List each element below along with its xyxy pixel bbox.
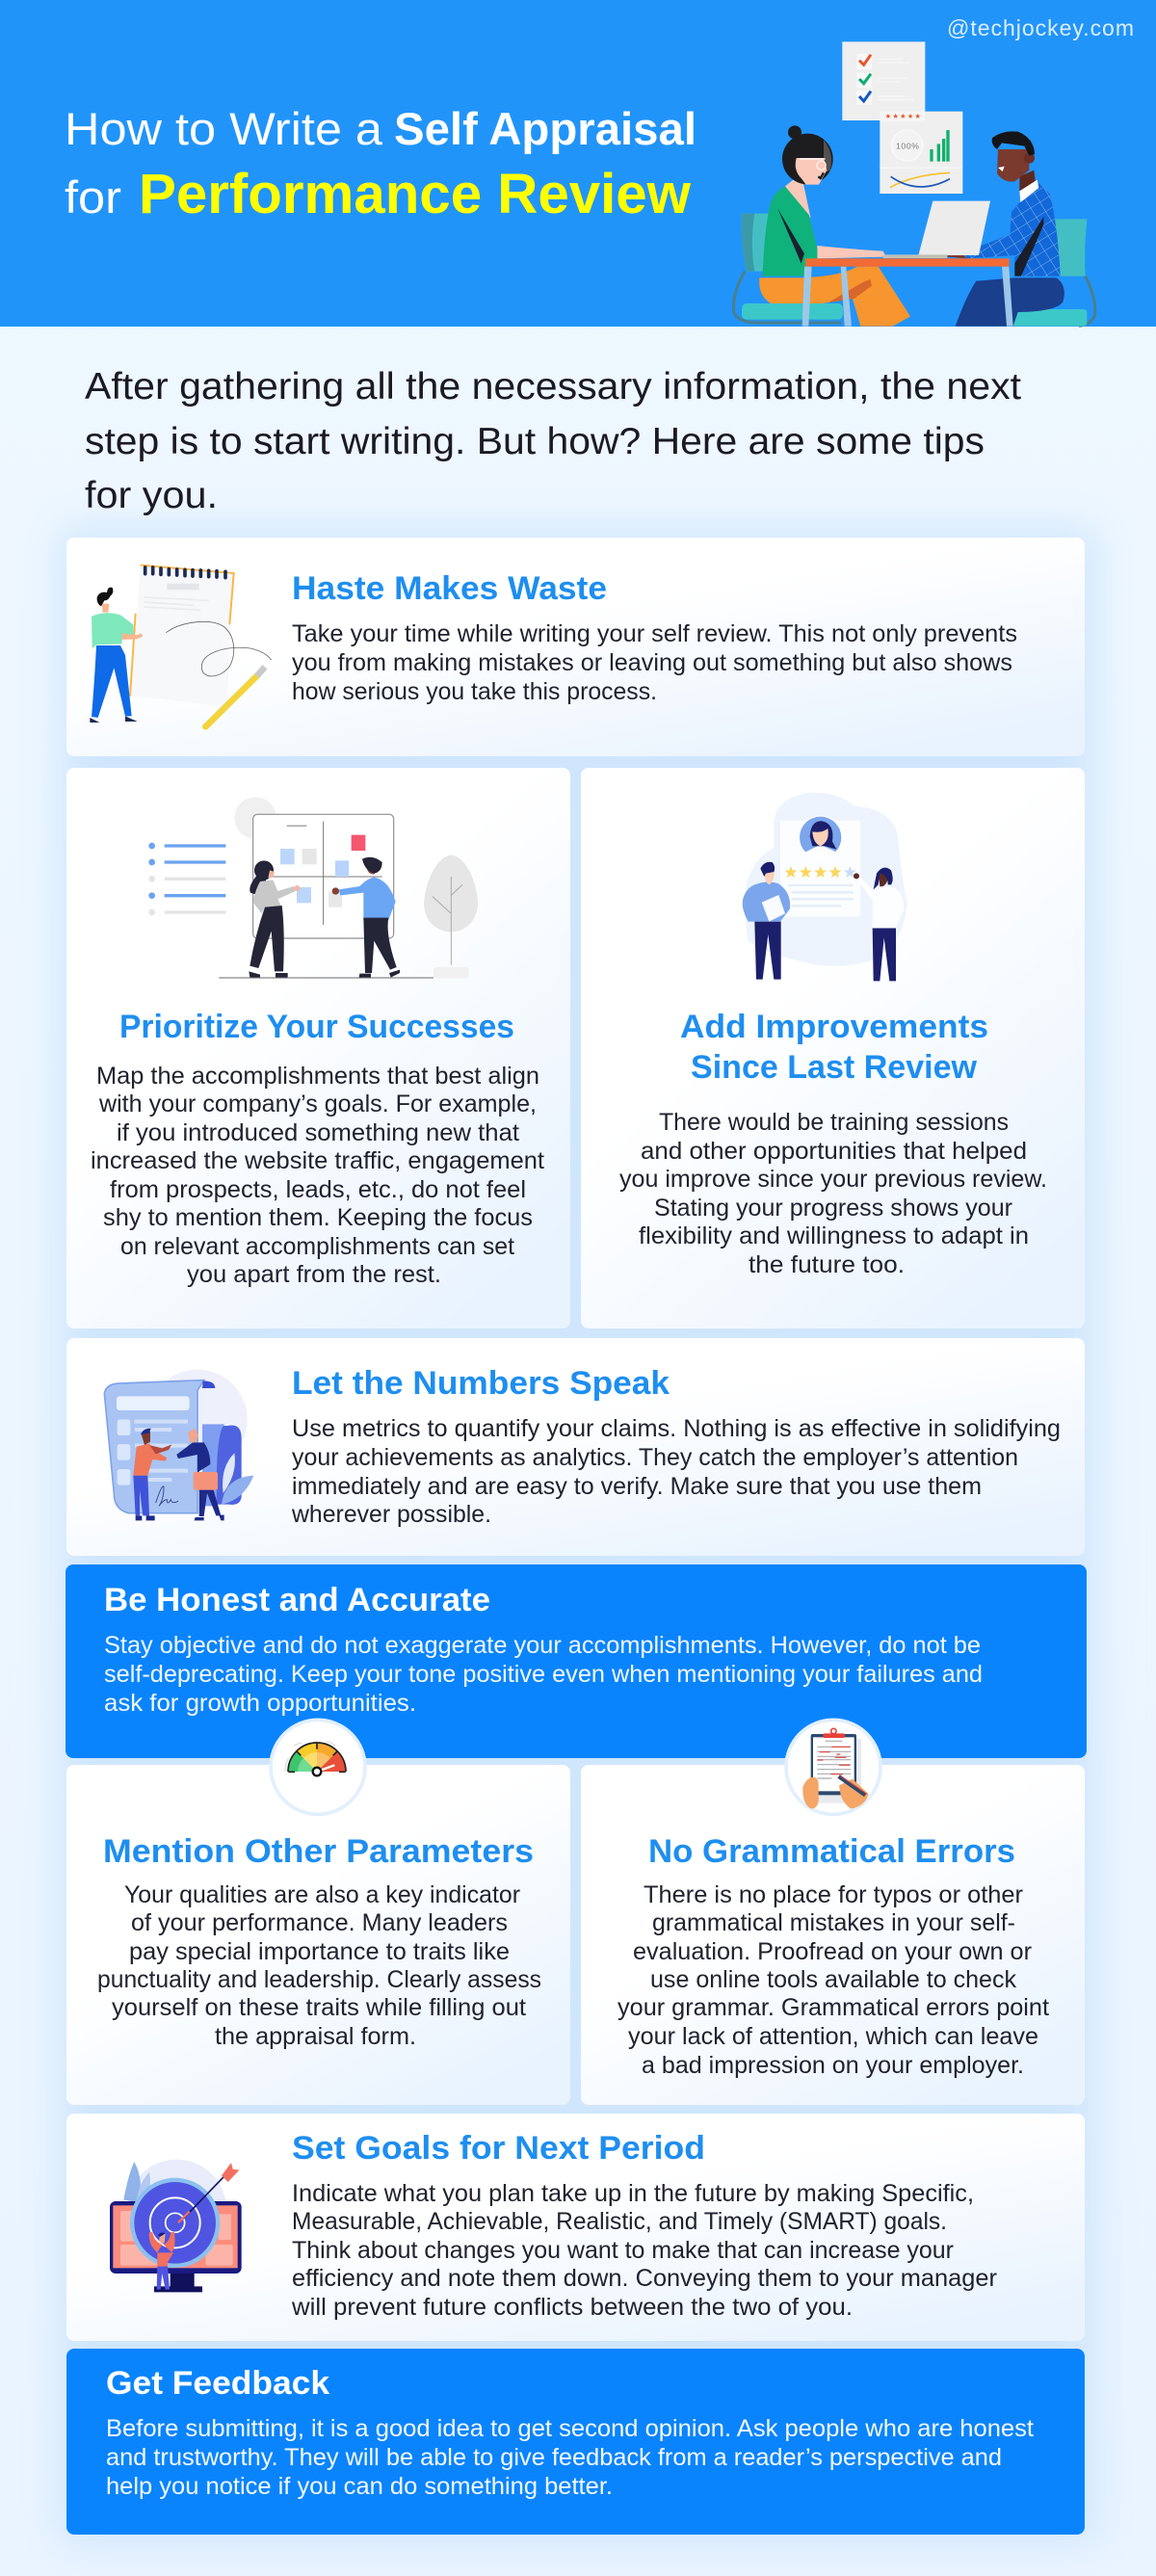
intro text: step is to start writing. But how? Here are some tips xyxy=(85,421,985,462)
stats document: ★★★★★ xyxy=(885,112,921,120)
body text: wherever possible. xyxy=(291,1501,491,1528)
woman xyxy=(759,125,910,327)
body text: Before submitting, it is a good idea to get second opinion. Ask people who are honest xyxy=(106,2415,1034,2442)
icon: team at a task board xyxy=(148,797,478,979)
title: Self Appraisal xyxy=(394,103,696,154)
body text: how serious you take this process. xyxy=(292,678,657,705)
heading: Since Last Review xyxy=(691,1049,978,1086)
man's chair xyxy=(994,219,1095,327)
table xyxy=(802,258,1013,327)
body text: your lack of attention, which can leave xyxy=(628,2023,1038,2050)
body text: the future too. xyxy=(749,1251,905,1278)
woman's chair xyxy=(733,214,843,323)
body text: self-deprecating. Keep your tone positive even when mentioning your failures and xyxy=(104,1661,983,1688)
panel: No Grammatical Errors xyxy=(581,1765,1085,2105)
intro text xyxy=(85,366,1021,516)
body text: punctuality and leadership. Clearly assess xyxy=(97,1966,541,1993)
body text xyxy=(106,2415,1034,2500)
body text xyxy=(619,1109,1047,1278)
heading: Set Goals for Next Period xyxy=(292,2130,705,2167)
body text: There is no place for typos or other xyxy=(644,1881,1023,1908)
title: Performance Review xyxy=(139,163,692,225)
body text: increased the website traffic, engagement xyxy=(91,1147,544,1174)
panel: Add Improvements Since Last Review xyxy=(581,768,1085,1328)
body text xyxy=(91,1063,544,1288)
logo: techjockey: @techjockey.com xyxy=(947,15,1134,40)
heading: Let the Numbers Speak xyxy=(292,1365,670,1402)
soft glow behind cards xyxy=(60,528,1096,2543)
body text: will prevent future conflicts between the two of you. xyxy=(291,2294,853,2321)
icon: clipboard with corrections xyxy=(786,1720,880,1814)
panel: Prioritize Your Successes xyxy=(66,768,570,1328)
body text: if you introduced something new that xyxy=(117,1119,519,1146)
body text xyxy=(291,2180,997,2321)
panel: Get Feedback xyxy=(66,2349,1085,2535)
panel: Set Goals for Next Period xyxy=(66,2114,1085,2341)
header banner xyxy=(0,0,1156,327)
icon: person with notepad and pencil xyxy=(90,565,272,726)
panel: Be Honest and Accurate xyxy=(66,1564,1087,1758)
body text: flexibility and willingness to adapt in xyxy=(639,1222,1029,1249)
body text: you from making mistakes or leaving out something but also shows xyxy=(292,649,1012,676)
heading: Mention Other Parameters xyxy=(103,1833,534,1870)
body text: shy to mention them. Keeping the focus xyxy=(103,1204,533,1231)
title: How to Write a xyxy=(65,103,383,154)
heading: Be Honest and Accurate xyxy=(104,1582,490,1618)
body text: Take your time while writing your self review. This not only prevents xyxy=(292,620,1017,647)
body text: pay special importance to traits like xyxy=(129,1938,510,1965)
body text xyxy=(97,1881,541,2050)
body text: of your performance. Many leaders xyxy=(131,1909,508,1936)
body text: use online tools available to check xyxy=(650,1966,1016,1993)
body text: Indicate what you plan take up in the future by making Specific, xyxy=(292,2180,974,2207)
body text: you improve since your previous review. xyxy=(619,1166,1047,1193)
body text: efficiency and note them down. Conveying them to your manager xyxy=(292,2265,997,2292)
body text: the appraisal form. xyxy=(215,2023,416,2050)
body text: immediately and are easy to verify. Make sure that you use them xyxy=(292,1473,982,1500)
heading: Add Improvements xyxy=(680,1009,988,1045)
intro text: for you. xyxy=(85,475,218,516)
body text: from prospects, leads, etc., do not feel xyxy=(110,1176,526,1203)
body text: help you notice if you can do something better. xyxy=(106,2473,613,2500)
body text: and trustworthy. They will be able to give feedback from a reader’s perspective and xyxy=(106,2444,1002,2471)
body text: and other opportunities that helped xyxy=(641,1138,1027,1165)
body text: yourself on these traits while filling out xyxy=(112,1994,526,2021)
body text: evaluation. Proofread on your own or xyxy=(633,1938,1032,1965)
body text: on relevant accomplishments can set xyxy=(120,1233,514,1260)
illustration: two people in a review meeting xyxy=(733,41,1095,327)
stats document xyxy=(880,112,962,194)
stats document: 100% xyxy=(896,141,919,150)
body text: your grammar. Grammatical errors point xyxy=(617,1994,1049,2021)
man xyxy=(947,131,1064,327)
laptop xyxy=(883,201,990,258)
intro text: After gathering all the necessary information, the next xyxy=(85,366,1021,407)
icon: performance gauge xyxy=(271,1720,365,1814)
body text: Think about changes you want to make that can increase your xyxy=(292,2237,954,2264)
panel: Mention Other Parameters xyxy=(66,1765,570,2105)
body text: Use metrics to quantify your claims. Nothing is as effective in solidifying xyxy=(292,1415,1061,1442)
body text: with your company’s goals. For example, xyxy=(98,1091,537,1117)
heading xyxy=(680,1009,988,1086)
icon: handshake over a signed document xyxy=(104,1370,253,1520)
title: for xyxy=(65,171,121,223)
heading: Haste Makes Waste xyxy=(292,570,607,607)
body text: Stay objective and do not exaggerate your accomplishments. However, do not be xyxy=(104,1632,981,1659)
body text: your achievements as analytics. They catch the employer’s attention xyxy=(292,1444,1018,1471)
body text xyxy=(292,620,1017,705)
title xyxy=(65,103,696,225)
heading: Get Feedback xyxy=(106,2365,329,2402)
body text xyxy=(104,1632,983,1717)
body text: Map the accomplishments that best align xyxy=(96,1063,539,1090)
body text: Stating your progress shows your xyxy=(654,1195,1012,1222)
icon: target on a monitor xyxy=(110,2160,242,2292)
heading: Prioritize Your Successes xyxy=(119,1009,514,1045)
body text: Your qualities are also a key indicator xyxy=(124,1881,520,1908)
body text: grammatical mistakes in your self- xyxy=(652,1909,1015,1936)
panel: Let the Numbers Speak xyxy=(66,1338,1085,1556)
heading: No Grammatical Errors xyxy=(648,1833,1015,1870)
body text xyxy=(291,1415,1061,1528)
body text: There would be training sessions xyxy=(659,1109,1009,1136)
icon: people reviewing a profile rating xyxy=(743,793,907,981)
panel: Haste Makes Waste xyxy=(66,538,1085,756)
body text: Measurable, Achievable, Realistic, and Timely (SMART) goals. xyxy=(292,2208,947,2235)
body text: ask for growth opportunities. xyxy=(104,1690,416,1717)
body text: you apart from the rest. xyxy=(187,1261,441,1288)
body text: a bad impression on your employer. xyxy=(642,2052,1024,2079)
body text xyxy=(617,1881,1049,2079)
checklist document xyxy=(842,41,925,120)
